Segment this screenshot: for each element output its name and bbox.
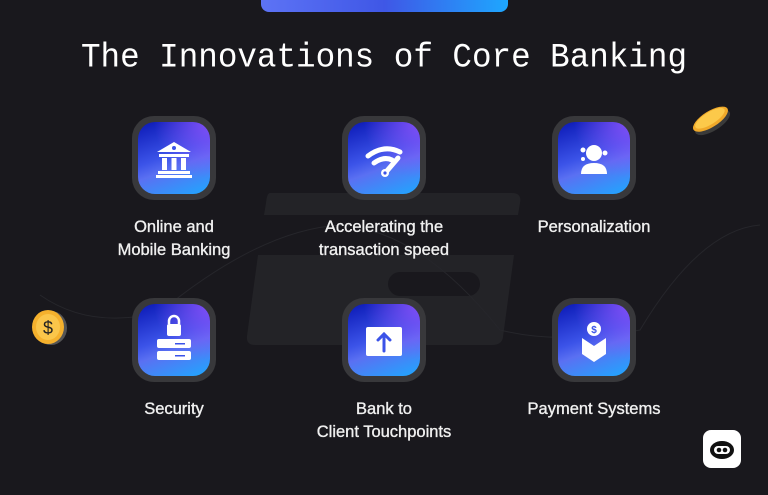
item: bank to client touchpoints bbox=[317, 298, 451, 441]
label: transaction speed bbox=[319, 241, 449, 259]
icon: payment box: $ bbox=[591, 325, 597, 336]
icon: bank bbox=[132, 116, 216, 200]
item: personalization bbox=[538, 116, 650, 236]
item: security bbox=[132, 298, 216, 418]
title: The Innovations of Core Banking bbox=[81, 38, 687, 77]
label bbox=[118, 218, 230, 259]
top gradient bar bbox=[261, 0, 508, 12]
label: Mobile Banking bbox=[118, 241, 230, 259]
item: online and mobile banking bbox=[118, 116, 230, 259]
icon: person bbox=[552, 116, 636, 200]
icon: coin left: $ bbox=[43, 318, 53, 338]
label: Online and bbox=[134, 218, 214, 236]
icon: upload bbox=[342, 298, 426, 382]
label: Bank to bbox=[356, 400, 412, 418]
label: Accelerating the bbox=[325, 218, 443, 236]
icon: coin top right bbox=[693, 106, 730, 135]
label bbox=[318, 218, 449, 259]
label: Security bbox=[144, 400, 204, 418]
icon: coin left bbox=[32, 310, 67, 345]
item: accelerating transaction speed bbox=[318, 116, 449, 259]
icon: speed bbox=[342, 116, 426, 200]
item: payment systems bbox=[528, 298, 660, 418]
icon: lock server bbox=[132, 298, 216, 382]
icon: payment box bbox=[552, 298, 636, 382]
label: Payment Systems bbox=[528, 400, 660, 418]
logo bbox=[703, 430, 741, 468]
label: Client Touchpoints bbox=[317, 423, 451, 441]
label bbox=[317, 400, 451, 441]
label: Personalization bbox=[538, 218, 650, 236]
